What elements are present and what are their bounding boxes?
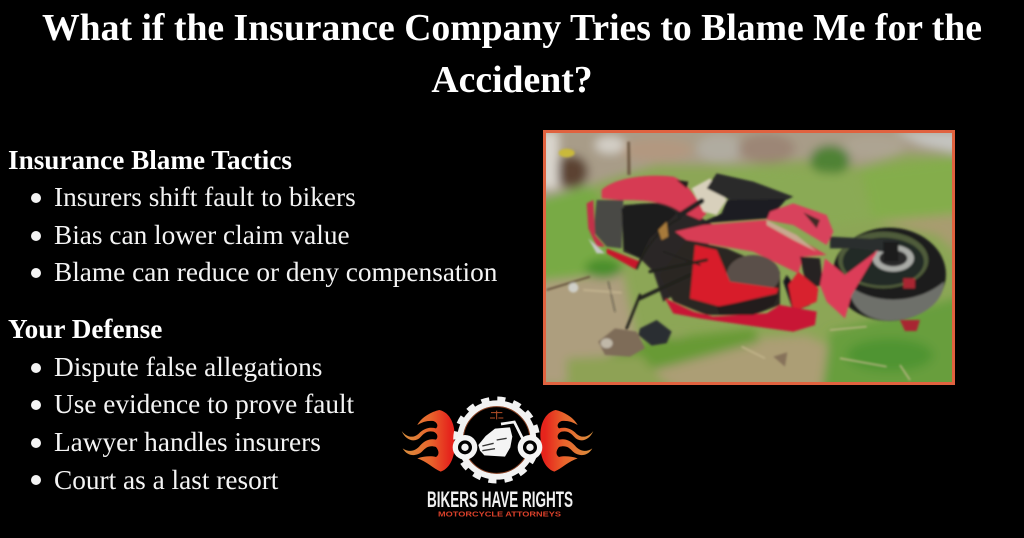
list: insurance blame tactics xyxy=(31,182,497,287)
list: insurance blame tactics: Insurers shift fault to bikers xyxy=(54,182,356,212)
icon: gear and motorcycle xyxy=(453,399,542,481)
title: Accident? xyxy=(431,59,593,101)
list: insurance blame tactics: Blame can reduce or deny compensation xyxy=(54,257,497,287)
grass patches xyxy=(865,164,952,216)
list: your defense: Court as a last resort xyxy=(54,465,278,495)
red upper fairing xyxy=(602,176,707,220)
list: your defense: Lawyer handles insurers xyxy=(54,427,321,457)
mirror and debris xyxy=(638,320,672,346)
list: your defense xyxy=(31,352,354,495)
front red fender xyxy=(820,250,878,318)
list: your defense: Use evidence to prove fault xyxy=(54,389,354,419)
main red fairing xyxy=(767,203,833,245)
dark body xyxy=(623,202,713,302)
red mid fairing xyxy=(690,245,778,307)
title: What if the Insurance Company Tries to Blame Me for the xyxy=(42,7,982,49)
wires xyxy=(608,218,707,328)
logo tagline: MOTORCYCLE ATTORNEYS xyxy=(438,512,561,518)
list: insurance blame tactics: Bias can lower claim value xyxy=(54,220,350,250)
heading: insurance blame tactics: Insurance Blame Tactics xyxy=(8,145,292,175)
dry ground xyxy=(520,273,637,385)
lower grass xyxy=(609,326,762,374)
icon: left flames xyxy=(402,410,455,472)
icon: right flames xyxy=(540,410,593,472)
stick and stone xyxy=(547,277,590,290)
stones and dirt band xyxy=(546,133,952,204)
rear wheel xyxy=(833,228,946,321)
engine xyxy=(660,240,780,315)
title xyxy=(42,7,982,101)
handle xyxy=(680,201,702,215)
list: your defense: Dispute false allegations xyxy=(54,352,322,382)
black seat and tank xyxy=(707,173,793,200)
yellow tag xyxy=(559,149,575,157)
photo: wrecked red motorcycle on grass xyxy=(543,130,955,385)
heading: your defense: Your Defense xyxy=(8,314,162,344)
logo: bikers have rights xyxy=(402,396,594,518)
